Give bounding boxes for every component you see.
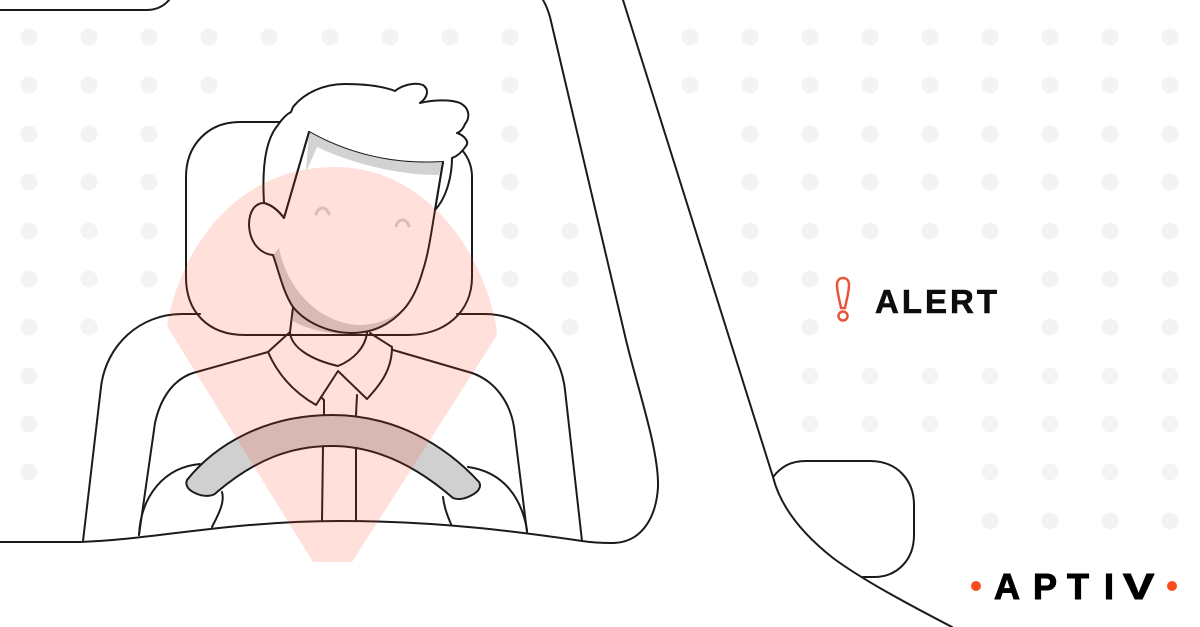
shirt placket [321,395,357,521]
Aptiv logo: T [1067,566,1089,607]
eyes [316,208,409,226]
steering wheel [186,415,480,499]
hair [263,84,468,218]
car outer pillar line [623,0,952,627]
car A-pillar and dashboard outline [0,0,658,543]
car interior top-left trim line [0,0,169,10]
shoulders and arms [139,350,527,535]
headrest [186,122,472,335]
Aptiv logo: V [1123,566,1154,607]
icon: exclamation mark [837,278,849,320]
side mirror [773,461,914,577]
driver seat [83,122,582,541]
alert label [837,278,1000,320]
neck line [290,307,293,332]
Aptiv logo: A [994,566,1020,607]
pink camera detection zone [167,167,497,562]
Aptiv logo [971,566,1177,607]
forearms and hands [139,464,527,535]
collar [268,332,392,405]
face and ear outline [249,132,443,333]
hairline shadow [306,132,443,175]
Aptiv logo: I [1104,566,1114,607]
driver body and shirt [139,332,527,535]
alert text: ALERT [875,283,1000,320]
driver head [249,84,468,333]
neck and face shadow [273,248,404,334]
Aptiv logo: P [1033,566,1057,607]
